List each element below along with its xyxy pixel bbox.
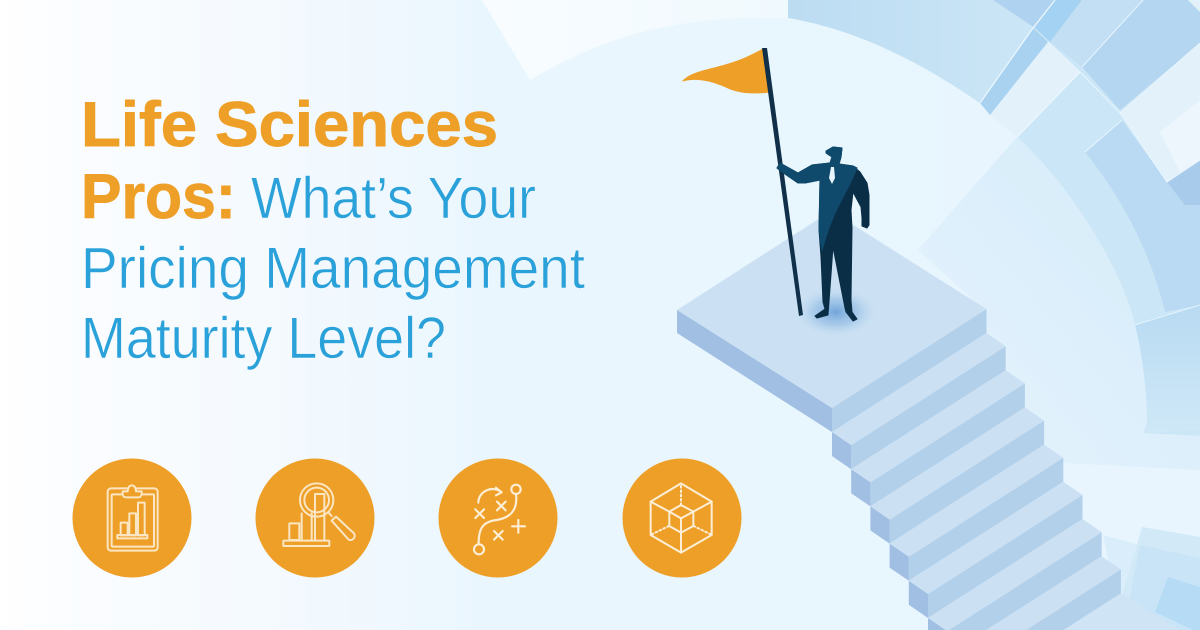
steps [832,333,1180,630]
icon: strategy play diagram [438,458,558,578]
staircase [677,211,1180,630]
title line: Pricing Management: Pricing Management [81,236,585,301]
title line: What's Your: What’s Your [251,166,536,231]
flag [682,48,769,93]
icon: nested cube [622,458,742,578]
icon: magnifier over bars [256,458,374,578]
title line: Pros: Pros: [81,162,236,232]
figure: businessman [777,147,869,321]
pole [762,48,803,316]
shadow under figure [796,288,876,336]
icon: clipboard with bar chart [72,458,192,578]
title line: Life Sciences: Life Sciences [81,90,498,160]
title line: Maturity Level: Maturity Level? [81,306,446,371]
platform [677,211,986,432]
geometric blue panels [788,0,1200,630]
title [81,90,585,371]
flag and pole [682,48,803,316]
